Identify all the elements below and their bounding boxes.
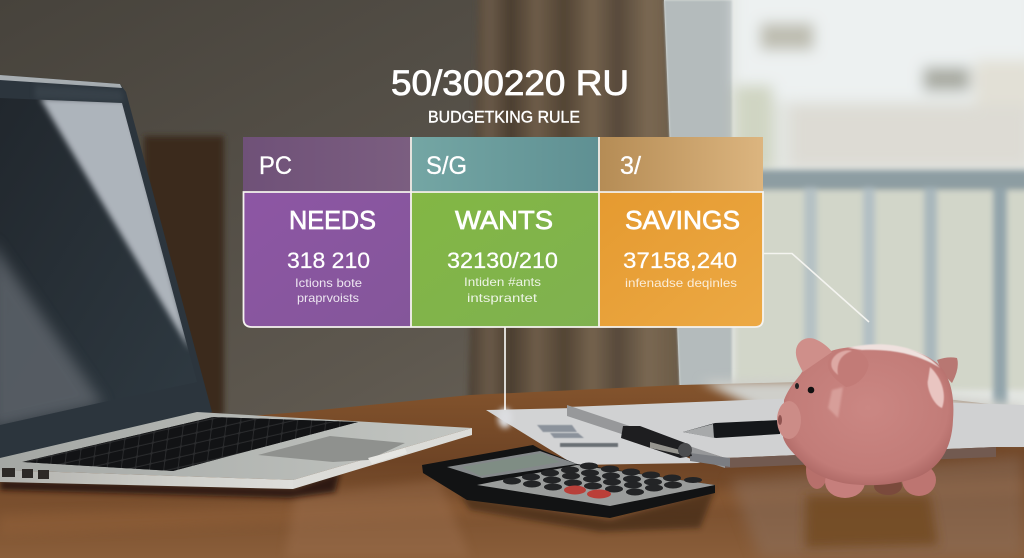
ports [2, 468, 49, 479]
paper sheet [486, 408, 700, 465]
calculator keypad [477, 465, 715, 506]
balcony railing [735, 170, 1024, 408]
background room [0, 0, 1024, 414]
window view [664, 0, 1024, 420]
pig tail [937, 357, 958, 383]
panel: needs: Ictions bote [295, 276, 362, 290]
connector line: wants to paper [504, 327, 506, 410]
header: S/G [412, 137, 598, 191]
pig legs [806, 451, 828, 489]
pig body [783, 345, 953, 485]
piggy bank [777, 338, 958, 548]
panel: savings [599, 192, 763, 327]
pig eyes [808, 387, 814, 393]
header: PC [243, 137, 410, 191]
panel: savings: 37158,240 [623, 248, 737, 273]
header: 3/: 3/ [620, 152, 641, 180]
laptop screen [0, 98, 197, 425]
calculator display frame [447, 451, 577, 478]
curtain [468, 0, 682, 410]
notebook [567, 398, 1024, 458]
laptop shadow [0, 472, 340, 498]
header: 3/ [600, 137, 763, 191]
budget table [243, 137, 763, 327]
trackpad [258, 436, 405, 462]
laptop lid [0, 75, 212, 470]
panel: wants [411, 192, 599, 327]
red keys [564, 486, 586, 494]
pig snout [777, 401, 801, 439]
panel: needs: 318 210 [287, 248, 370, 273]
calculator [422, 445, 715, 518]
connector arrow: savings to piggy bank [763, 254, 869, 322]
wooden furniture [144, 136, 224, 416]
laptop [0, 75, 472, 489]
panel: wants: 32130/210 [447, 248, 558, 273]
pig reflection [805, 495, 938, 548]
wooden table [0, 380, 1024, 558]
pen back [683, 420, 780, 438]
panel: needs: NEEDS [289, 205, 376, 235]
panel: savings: SAVINGS [625, 205, 740, 235]
pig ear left [796, 338, 832, 372]
calculator display [462, 453, 560, 476]
subtitle: BUDGETKING RULE [428, 108, 580, 126]
header: S/G: S/G [426, 152, 467, 180]
panel: savings: infenadse deqinles [625, 276, 737, 290]
panel: needs [244, 192, 411, 327]
pen front [621, 426, 692, 458]
keyboard [22, 417, 358, 471]
laptop base [0, 412, 472, 480]
header: PC: PC [259, 152, 292, 180]
table grid lines [244, 137, 763, 327]
panel: wants: intsprantet [467, 291, 538, 305]
title: 50/300220 RU [391, 64, 629, 103]
panel: needs: praprvoists [297, 291, 359, 305]
papers and notebook [486, 398, 1024, 468]
panel: wants: WANTS [455, 205, 553, 235]
pig ear right [828, 348, 869, 387]
calculator shadow [460, 490, 715, 532]
panel: wants: Intiden #ants [464, 275, 541, 289]
